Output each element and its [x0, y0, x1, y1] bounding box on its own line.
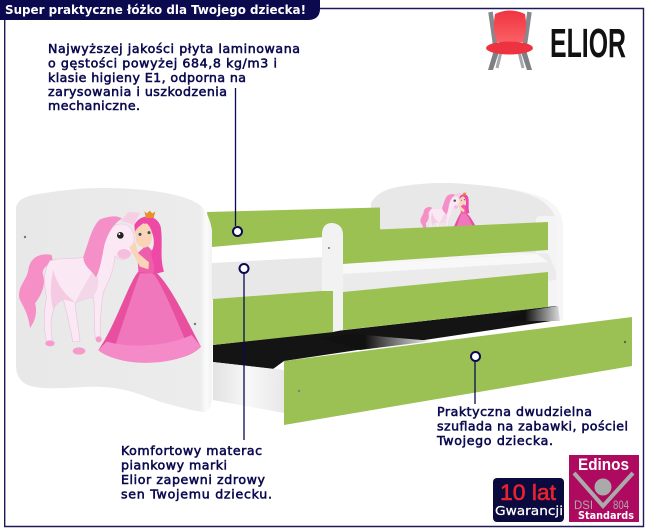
- callout: mattress: [121, 264, 272, 502]
- right headboard: [371, 183, 563, 320]
- front guard rail: [343, 222, 548, 264]
- callout: drawer: Praktyczna dwudzielna: [437, 404, 592, 419]
- badge: Edinos standards: Edinos: [578, 455, 629, 474]
- drawer: [284, 317, 632, 425]
- title banner: Super praktyczne łóżko dla Twojego dziecka!: [5, 2, 306, 17]
- callout: board: klasie higieny E1, odporna na: [48, 70, 246, 85]
- callout: mattress: sen Twojemu dziecku.: [121, 486, 272, 502]
- callout: mattress: piankowy marki: [121, 458, 227, 472]
- callout: board: [48, 41, 300, 236]
- callout: mattress: Elior zapewni zdrowy: [121, 472, 266, 487]
- callout: mattress: Komfortowy materac: [121, 443, 262, 458]
- callout: drawer: szuflada na zabawki, pościel: [437, 418, 628, 434]
- badge: Edinos standards: Standards: [578, 510, 634, 522]
- guard post: [322, 223, 343, 332]
- right lower rail: [343, 272, 548, 330]
- badge: Edinos standards: DSI: [574, 498, 593, 512]
- badge: Edinos standards: [569, 455, 639, 522]
- badge: 10 year warranty: Gwarancji: [495, 504, 563, 518]
- callout: drawer: Twojego dziecka.: [436, 433, 553, 448]
- white base: [213, 362, 284, 413]
- badge: 10 year warranty: [493, 478, 564, 522]
- drawer cavity: [213, 306, 560, 369]
- badge: Edinos standards: 804: [613, 498, 629, 512]
- logo: Elior chair: [486, 10, 626, 70]
- left headboard with princess: [16, 188, 212, 412]
- mattress: [212, 253, 556, 300]
- badge: 10 year warranty: 10 lat: [500, 480, 556, 505]
- callout: board: zarysowania i uszkodzenia: [48, 84, 227, 99]
- callout: board: o gęstości powyżej 684,8 kg/m3 i: [48, 56, 277, 70]
- bed illustration: [16, 183, 632, 425]
- back rail: [207, 208, 380, 247]
- left lower rail: [213, 290, 334, 345]
- callout: drawer: [436, 352, 628, 448]
- callout: board: Najwyższej jakości płyta laminowana: [48, 41, 300, 56]
- callout: board: mechaniczne.: [48, 98, 140, 113]
